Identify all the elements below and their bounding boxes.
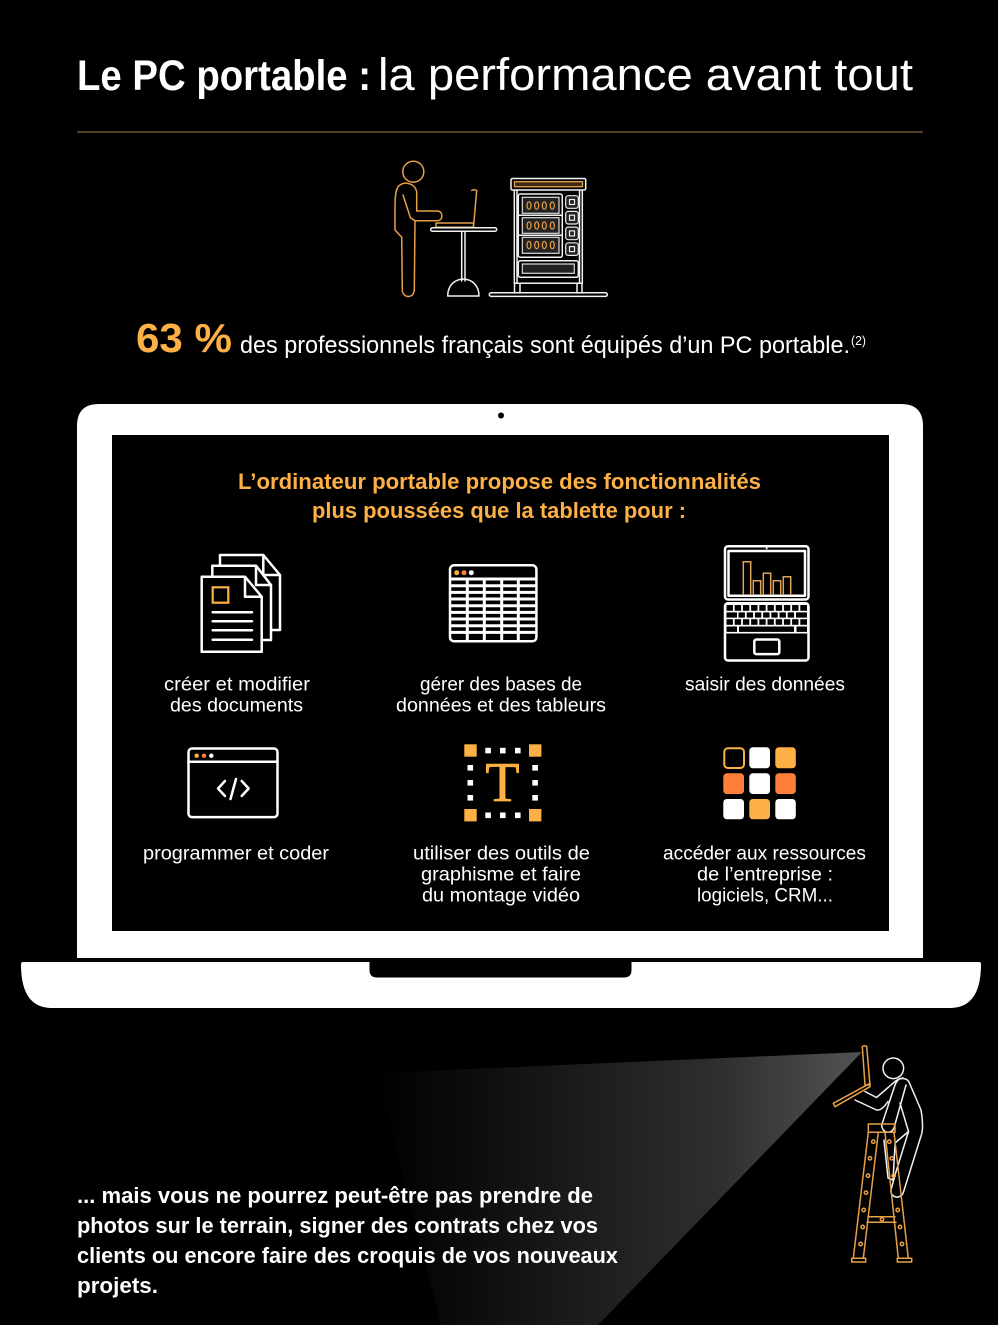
laptop lid: [77, 404, 923, 958]
icon: laptop with keyboard: [725, 546, 808, 660]
screen heading: [238, 469, 761, 523]
icon: spreadsheet: [450, 565, 536, 641]
statistic: 63 %: [136, 315, 866, 361]
light beam from laptop: [377, 1052, 862, 1325]
icon: app grid: [723, 747, 796, 819]
closing text: projets.: [77, 1273, 158, 1298]
label: graphics tools: [413, 844, 590, 906]
label: resources: de l’entreprise :: [697, 864, 833, 886]
icon: text frame: [464, 744, 541, 821]
label: code: programmer et coder: [143, 844, 330, 864]
closing text: photos sur le terrain, signer des contrats chez vos: [77, 1213, 598, 1238]
screen heading: plus poussées que la tablette pour :: [312, 498, 686, 523]
title: Le PC portable :: [77, 52, 371, 100]
label: databases: données et des tableurs: [396, 696, 606, 716]
icon: person at a standing table beside a vending machine: [395, 161, 607, 297]
label: graphics tools: utiliser des outils de: [413, 844, 590, 864]
statistic: 63 %: des professionnels français sont équipés d’un PC portable.: [240, 332, 850, 359]
label: databases: gérer des bases de: [420, 674, 582, 696]
icon: code window: [188, 748, 278, 817]
label: documents: [164, 674, 311, 716]
panel: laptop illustration: [21, 404, 981, 1008]
icon: person on a ladder holding a laptop: [833, 1046, 922, 1262]
closing text: ... mais vous ne pourrez peut-être pas prendre de: [77, 1183, 593, 1208]
label: graphics tools: graphisme et faire: [421, 864, 581, 886]
label: graphics tools: du montage vidéo: [422, 886, 580, 906]
icon: text frame: T: [485, 752, 520, 814]
label: documents: créer et modifier: [164, 674, 311, 696]
label: documents: des documents: [170, 696, 303, 716]
label: databases: [396, 674, 606, 716]
label: resources: accéder aux ressources: [663, 844, 866, 864]
title: la performance avant tout: [378, 49, 914, 100]
label: resources: [663, 844, 866, 906]
webcam: [498, 412, 504, 418]
laptop screen: [112, 435, 889, 931]
label: data entry: saisir des données: [685, 674, 845, 696]
laptop base: [21, 962, 981, 1008]
label: resources: logiciels, CRM...: [697, 886, 833, 906]
closing text: clients ou encore faire des croquis de vos nouveaux: [77, 1243, 619, 1268]
screen heading: L’ordinateur portable propose des fonctionnalités: [238, 469, 761, 494]
statistic: 63 %: (2): [851, 333, 866, 348]
title: [77, 49, 914, 100]
icon: documents: [202, 555, 280, 652]
closing text: [77, 1183, 619, 1298]
statistic: 63 %: 63 %: [136, 315, 232, 361]
